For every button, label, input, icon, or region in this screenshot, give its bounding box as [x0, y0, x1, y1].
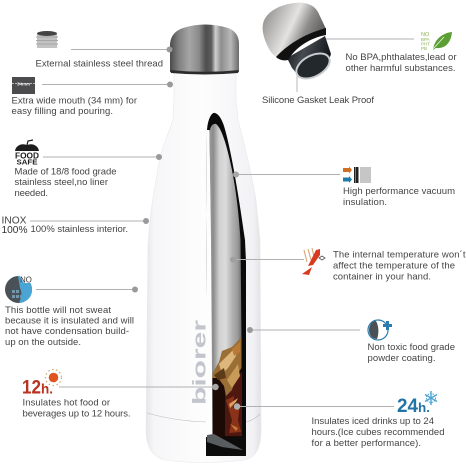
- icon: inox 100%: 100%: [2, 224, 28, 236]
- leader: mouth: [42, 82, 173, 88]
- text: food grade: stainless steel,no liner: [14, 177, 108, 188]
- icon: no sweat: [5, 275, 33, 303]
- icon: no bpa leaf: NO: [421, 32, 430, 38]
- leader: iced: [234, 403, 394, 410]
- bottle: [146, 24, 261, 462]
- text: hot: Insulates hot food or: [22, 398, 110, 408]
- text: no sweat: up on the outside.: [5, 337, 81, 348]
- icon: 24h snowflake: 24: [397, 396, 418, 417]
- icon: inox 100%: [2, 214, 28, 236]
- text: no bpa: other harmful substances.: [346, 63, 456, 74]
- leader: no sweat: [36, 286, 138, 292]
- text: no sweat: [5, 305, 134, 348]
- text: food grade: needed.: [14, 188, 48, 199]
- icon: 12h sun: [22, 370, 62, 398]
- text: food grade: Made of 18/8 food grade: [14, 166, 116, 178]
- icon: 34 mm mouth: 34mm: [17, 82, 30, 86]
- icon: no sweat: NO: [20, 276, 32, 284]
- leader: food safe: [43, 154, 162, 160]
- text: vacuum: High performance vacuum: [343, 186, 455, 197]
- steel cap: [170, 24, 239, 74]
- lid inner plug: [287, 36, 331, 77]
- leader: thread: [71, 46, 172, 52]
- icon: no bpa leaf: PHT: [421, 42, 430, 46]
- icon: food safe: SAFE: [16, 160, 38, 166]
- lid black rim: [276, 28, 326, 60]
- text: internal temperature: [333, 250, 466, 282]
- icon: thread: [36, 31, 58, 48]
- leader: leaf: [324, 38, 414, 40]
- text: mouth: Extra wide mouth (34 mm) for: [12, 96, 137, 106]
- text: powder coating: powder coating.: [368, 353, 436, 364]
- text: powder coating: [368, 342, 455, 364]
- text: gasket: Silicone Gasket Leak Proof: [262, 95, 374, 106]
- text: mouth: [12, 96, 137, 117]
- text: hot: beverages up to 12 hours.: [22, 408, 130, 419]
- icon: hand temperature: [302, 248, 325, 275]
- icon: food safe: [15, 140, 39, 166]
- icon: 24h snowflake: h.: [418, 400, 430, 415]
- text: internal temperature: affect the temperature of the: [333, 260, 455, 272]
- icon: powder coating: [368, 320, 392, 340]
- text: hot: [22, 398, 130, 419]
- text: food grade: [14, 166, 116, 199]
- text: internal temperature: The internal temperature won´t: [333, 250, 466, 260]
- steel lid: [263, 3, 326, 58]
- leader: internal temperature: [230, 256, 304, 262]
- cap photo: [263, 3, 334, 84]
- icon: 34 mm mouth: [12, 77, 35, 94]
- text: inox: 100% stainless interior.: [30, 224, 128, 235]
- text: thread: External stainless steel thread: [36, 58, 163, 69]
- icon: 24h snowflake: [397, 391, 437, 417]
- icon: no bpa leaf: PB: [421, 46, 427, 51]
- leader: vacuum: [233, 172, 340, 178]
- bottle base seam: [147, 413, 260, 422]
- icon: inox 100%: INOX: [2, 214, 26, 226]
- bottle bottom: [206, 437, 246, 456]
- icon: food safe: FOOD: [15, 152, 39, 160]
- icon: no bpa leaf: BPA: [421, 37, 430, 42]
- leader: hot: [59, 384, 219, 390]
- leader: inox: [30, 218, 149, 224]
- text: iced: for a better performance).: [312, 438, 421, 449]
- text: no sweat: This bottle will not sweat: [5, 305, 111, 316]
- text: mouth: easy filling and pouring.: [12, 106, 113, 117]
- text: vacuum: insulation.: [343, 197, 387, 208]
- text: iced: [312, 416, 444, 449]
- text: no bpa: [346, 52, 456, 74]
- cutaway interior: [206, 113, 246, 456]
- text: internal temperature: container in your hand.: [333, 271, 431, 282]
- icon: no bpa leaf: [421, 32, 452, 51]
- dark liquid: [212, 338, 242, 437]
- text: no sweat: not have condensation build-: [5, 326, 129, 337]
- text: no bpa: No BPA,phthalates,lead or: [346, 52, 456, 63]
- text: vacuum: [343, 186, 455, 208]
- text: iced: Insulates iced drinks up to 24: [312, 416, 434, 427]
- text: powder coating: Non toxic food grade: [368, 342, 455, 353]
- icon: 12h sun: h.: [41, 380, 53, 396]
- foam: [212, 337, 242, 396]
- text: no sweat: because it is insulated and will: [5, 316, 134, 326]
- icon: vacuum: [343, 166, 371, 183]
- bottle body: [146, 70, 261, 462]
- text: iced: hours.(Ice cubes recommended: [312, 427, 444, 438]
- icon: 12h sun: 12: [22, 378, 41, 398]
- brand name: biorer: [190, 320, 210, 405]
- leader: gasket: [296, 76, 298, 92]
- leader: powder coating: [247, 327, 360, 333]
- gasket ring: [292, 48, 334, 84]
